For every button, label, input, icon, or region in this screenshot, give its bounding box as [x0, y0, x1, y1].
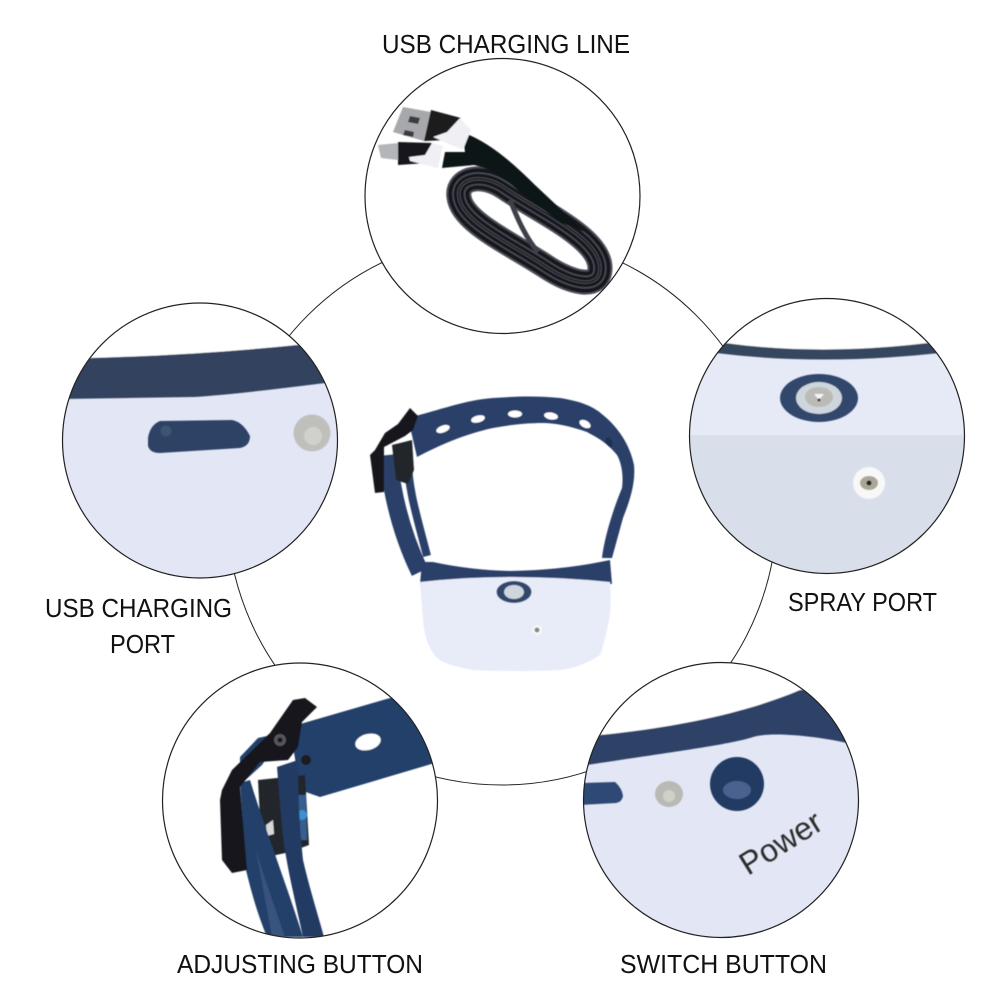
label: USB charging port — [45, 593, 232, 659]
icon: spray nozzle ring — [780, 374, 858, 422]
icon: USB-A connector — [393, 107, 471, 150]
label: USB charging port: PORT — [110, 629, 175, 659]
label: switch button: SWITCH BUTTON — [620, 949, 827, 979]
icon: port edge — [580, 782, 623, 805]
label: USB charging line: USB CHARGING LINE — [382, 29, 630, 59]
icon: strap edge — [70, 344, 324, 400]
label: spray port: SPRAY PORT — [788, 587, 937, 617]
icon: white background above strap — [726, 299, 928, 350]
icon: USB port slot — [148, 420, 250, 453]
icon: looped strap — [240, 780, 303, 937]
icon: lower band — [420, 560, 612, 584]
icon: white background above strap — [90, 304, 298, 359]
icon: indicator light — [294, 414, 330, 452]
panel: USB charging line — [365, 58, 640, 334]
panel: switch button — [575, 655, 870, 938]
icon: white background above strap — [600, 663, 803, 736]
icon: inner buckle parts — [392, 440, 414, 484]
icon: collar body — [420, 577, 611, 671]
panel: USB charging port — [50, 295, 350, 578]
icon: back of strap — [239, 735, 268, 780]
icon: strap with hole — [293, 697, 432, 798]
icon: strap edge — [716, 343, 940, 360]
icon: power button — [710, 757, 764, 811]
icon: sensor — [532, 625, 542, 635]
icon: strap — [408, 396, 634, 558]
icon: black buckle — [220, 698, 317, 873]
icon: left looped straps — [388, 455, 427, 572]
icon: inner buckle parts — [258, 775, 309, 858]
label: adjusting button: ADJUSTING BUTTON — [177, 949, 423, 979]
icon: nozzle — [496, 581, 532, 603]
label: USB charging port: USB CHARGING — [45, 593, 232, 623]
icon: coiled flat cable — [459, 179, 600, 282]
icon: black buckle — [370, 408, 418, 493]
panel: spray port — [688, 298, 966, 574]
icon: cable strands to connectors — [442, 132, 585, 232]
icon: small sensor port — [853, 467, 885, 499]
icon: indicator light — [655, 781, 683, 807]
panel: adjusting button — [162, 663, 445, 938]
icon: housing shading — [690, 435, 964, 573]
icon: strap edge — [588, 689, 846, 766]
icon: micro USB connector — [378, 142, 443, 168]
text: Power label: Power — [733, 803, 829, 882]
central product: collar — [370, 396, 634, 671]
